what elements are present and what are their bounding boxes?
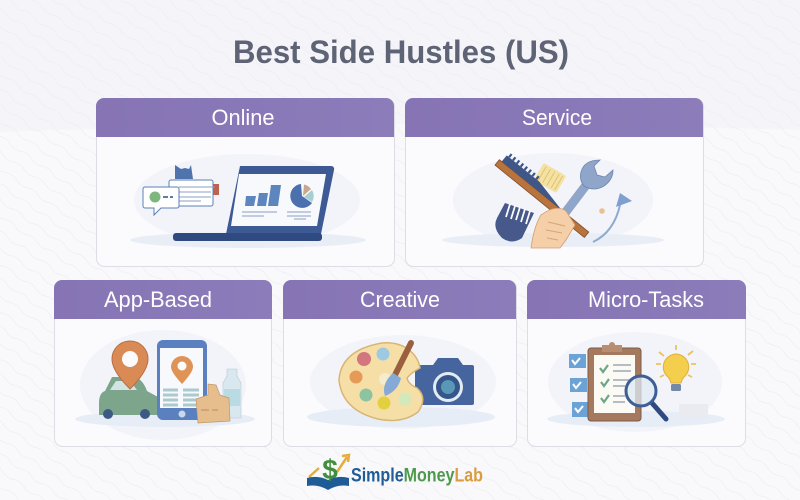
header: Online: Online [212, 105, 274, 130]
icon: magnifying glass [626, 376, 666, 419]
icon: open book [307, 477, 349, 490]
icon: comb [495, 150, 596, 237]
illustration backdrop [307, 335, 496, 429]
icon: blue checkboxes [569, 354, 589, 417]
icon: location pin [112, 341, 148, 389]
icon: clipboard checklist [588, 342, 641, 421]
wordmark: SimpleMoneyLab [351, 466, 483, 486]
icon: paint brush [384, 343, 411, 396]
icon: smartphone [157, 340, 207, 420]
icon: paint palette [339, 343, 423, 420]
icon: hand [531, 208, 575, 248]
header: Micro-Tasks [527, 280, 746, 319]
icon: faded box [679, 404, 708, 418]
illustration backdrop [442, 153, 664, 247]
logo: SimpleMoneyLab [307, 454, 483, 490]
icon: paper bag [196, 384, 230, 423]
header: Creative [283, 280, 516, 319]
icon: laptop with charts [173, 166, 334, 241]
header: App-Based: App-Based [104, 287, 212, 312]
header: Service: Service [522, 105, 592, 130]
panel: Service [405, 98, 704, 266]
illustration backdrop [75, 330, 255, 440]
icon: clipper [495, 203, 534, 242]
icon: yellow brush [534, 163, 566, 193]
header: App-Based [54, 280, 272, 319]
icon: water bottle [223, 369, 241, 418]
icon: camera [415, 358, 474, 405]
panel: Online [96, 98, 394, 266]
illustration backdrop [547, 332, 725, 432]
icon: dollar sign: $ [322, 454, 338, 485]
panel: Micro-Tasks [527, 280, 746, 446]
icon: green car [99, 377, 158, 419]
header: Online [96, 98, 394, 137]
title: Best Side Hustles (US) [233, 34, 569, 70]
icon: light bulb [656, 345, 696, 391]
panel: Creative [283, 280, 516, 446]
header: Micro-Tasks: Micro-Tasks [588, 287, 704, 312]
icon: circular arrow [593, 193, 632, 242]
icon: growth arrows [309, 455, 349, 477]
icon: chat bubbles [143, 165, 219, 215]
icon: wrench [565, 160, 613, 213]
illustration backdrop [130, 154, 366, 248]
header: Creative: Creative [360, 287, 440, 312]
header: Service [405, 98, 703, 137]
panel: App-Based [54, 280, 272, 446]
